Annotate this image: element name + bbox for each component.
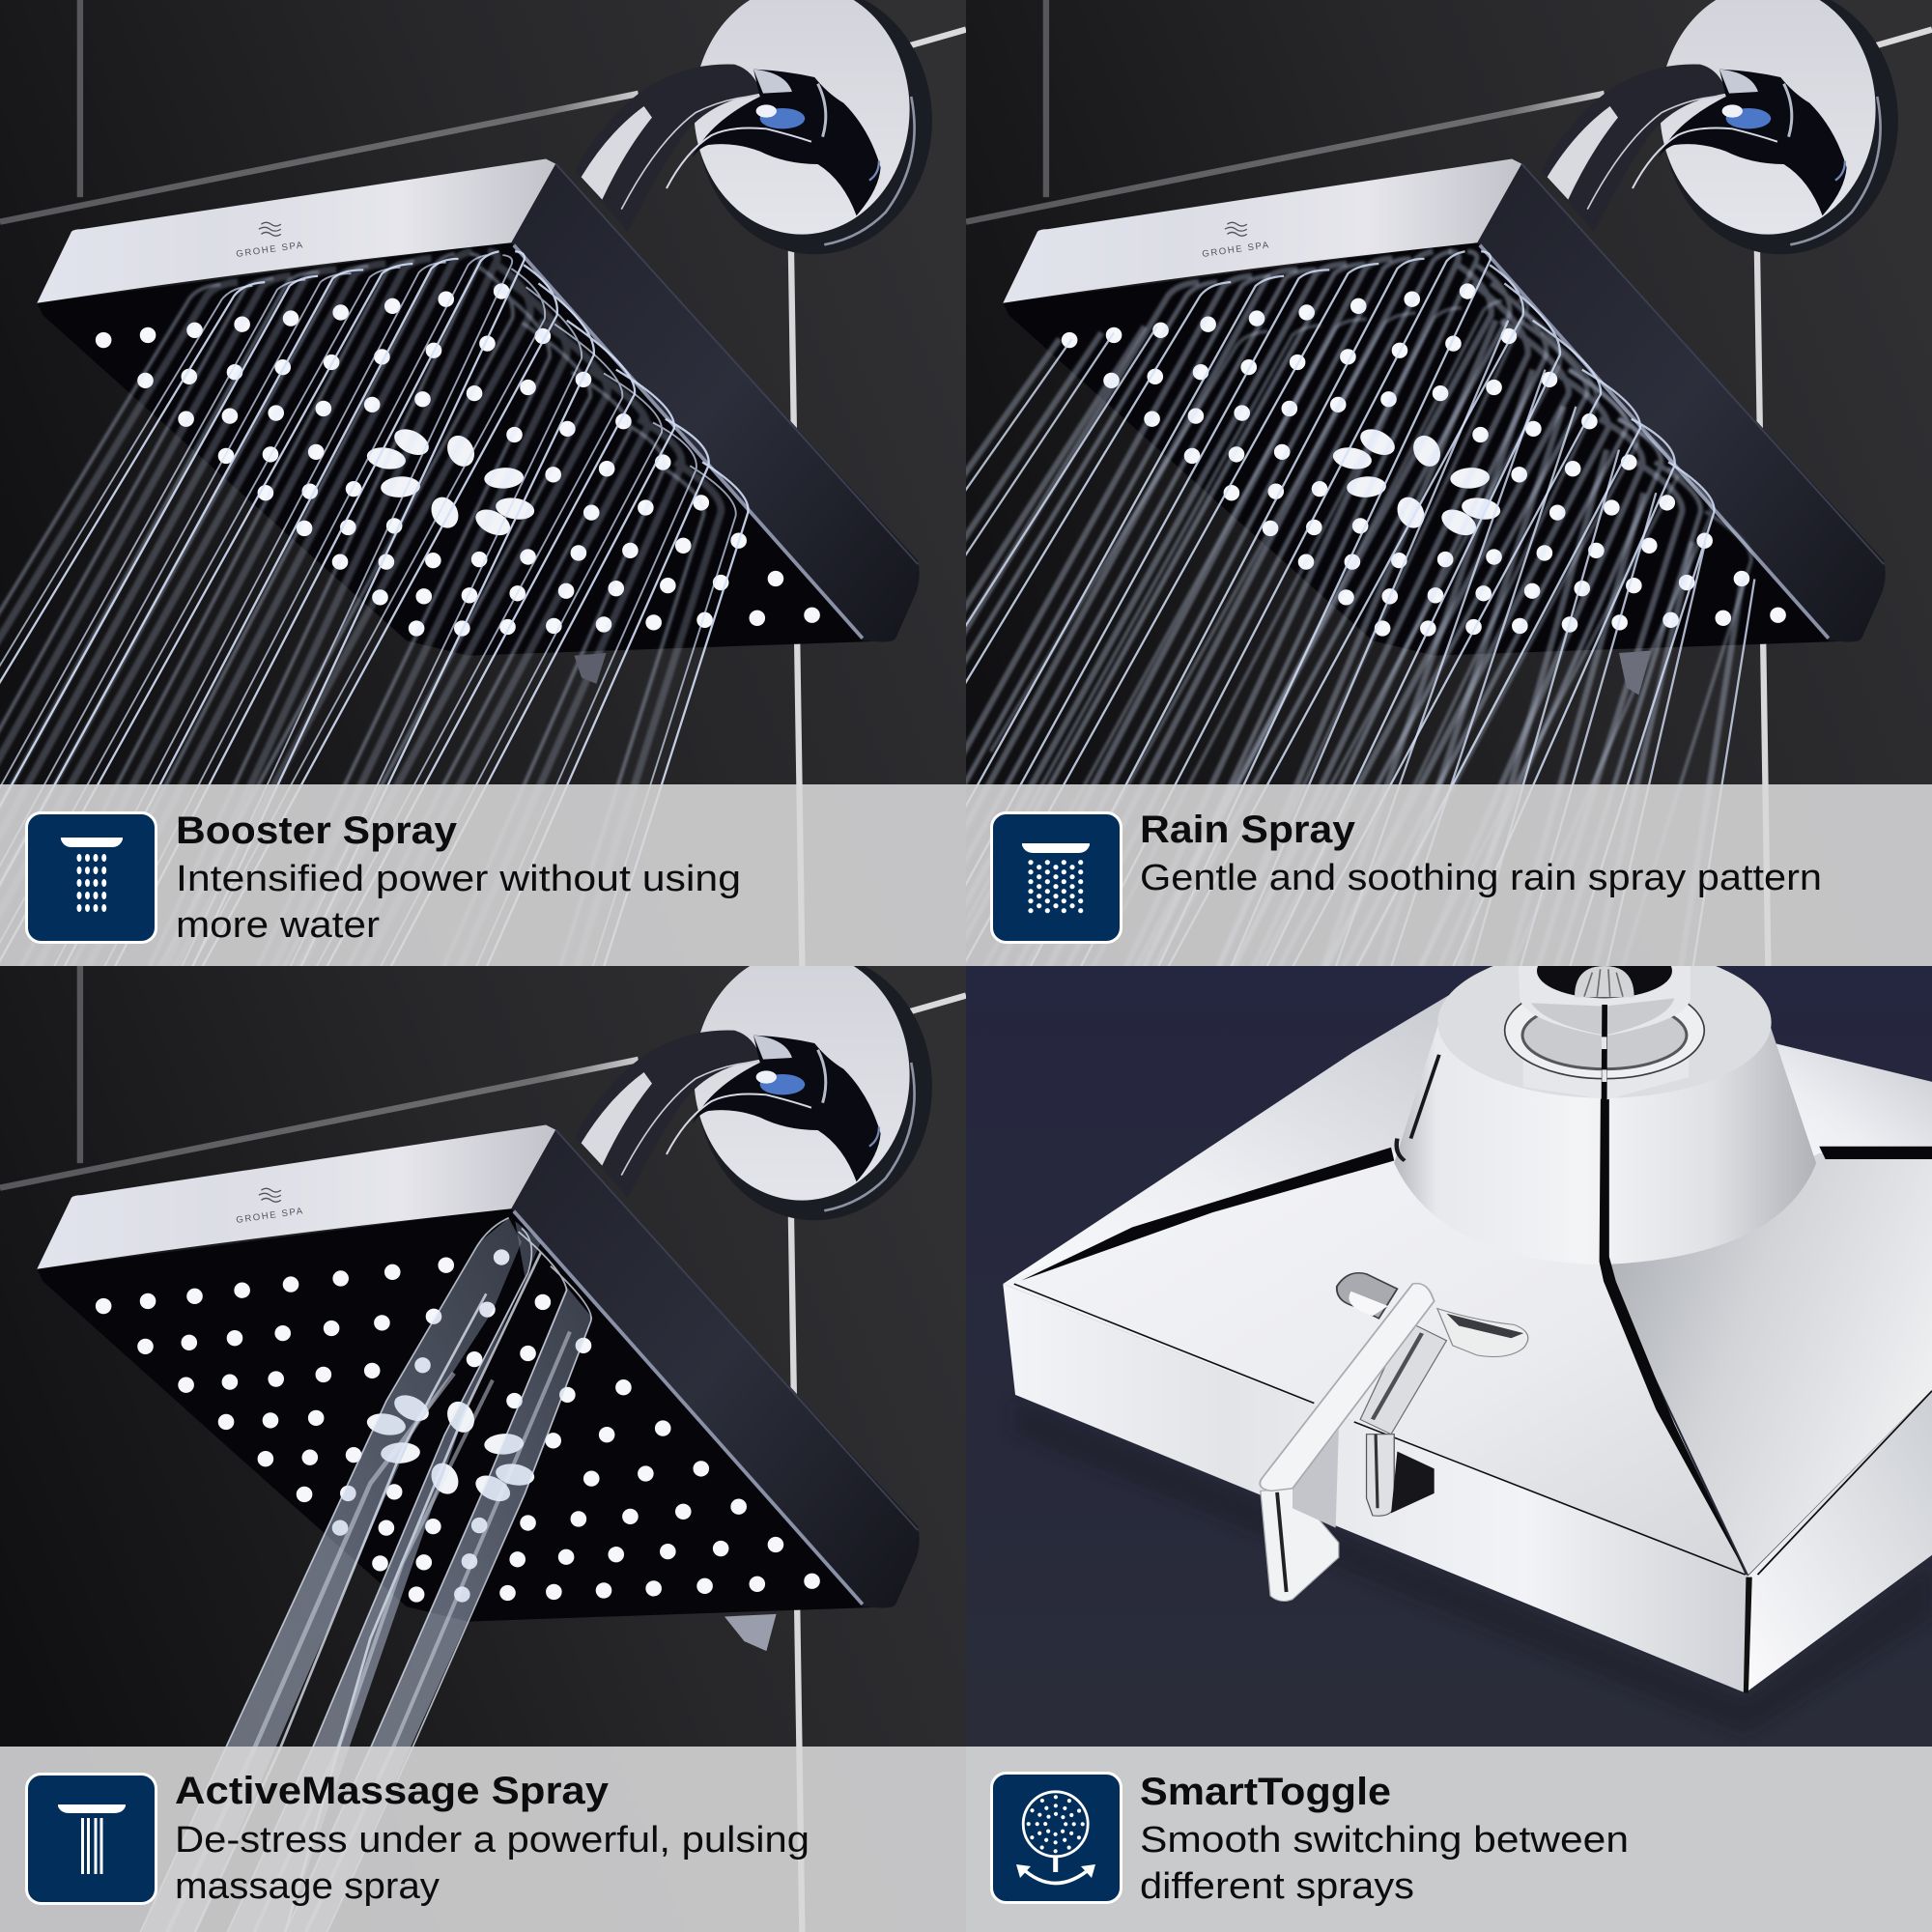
lever arm — [1260, 1284, 1435, 1491]
panel: booster spray — [0, 0, 966, 971]
caption bar — [0, 784, 966, 966]
icon: smarttoggle — [991, 1774, 1121, 1903]
caption text: rain spray: Rain Spray — [1140, 809, 1356, 851]
threaded fitting — [1437, 944, 1772, 1159]
caption text: smarttoggle: Smooth switching between — [1140, 1820, 1629, 1861]
lever lower blade — [1261, 1489, 1339, 1602]
caption text: booster spray: Intensified power without using — [176, 859, 741, 899]
icon: activemassage spray — [27, 1774, 156, 1903]
photo: booster spray shower head — [0, 0, 966, 966]
caption text: smarttoggle — [1140, 1771, 1629, 1907]
caption bar — [966, 1747, 1932, 1932]
top front faces — [1003, 1149, 1746, 1575]
cone — [1394, 1025, 1816, 1264]
caption text: rain spray: Gentle and soothing rain spray pattern — [1140, 858, 1822, 898]
panel: rain spray — [844, 0, 1932, 1016]
dark reflections — [1600, 1099, 1746, 1573]
caption text: activemassage spray: massage spray — [175, 1866, 440, 1907]
caption text: activemassage spray — [175, 1770, 810, 1907]
panel: activemassage spray — [0, 951, 966, 1932]
caption text: booster spray: more water — [176, 905, 380, 946]
icon: rain spray — [991, 813, 1121, 943]
caption text: smarttoggle: SmartToggle — [1140, 1771, 1391, 1813]
stem — [1367, 1435, 1394, 1516]
spray strands — [844, 251, 1754, 1016]
massage jets — [140, 1218, 592, 1932]
brand mark: GROHE SPA — [236, 240, 305, 260]
edge lines — [1014, 1284, 1932, 1575]
caption text: booster spray: Booster Spray — [176, 810, 458, 852]
knob under head — [1619, 650, 1651, 695]
caption text: rain spray — [1140, 809, 1822, 898]
slots — [1337, 1273, 1397, 1319]
brand mark: GROHE SPA — [236, 1206, 305, 1226]
caption text: booster spray — [176, 810, 741, 946]
icon: booster spray — [27, 813, 156, 943]
caption text: activemassage spray: ActiveMassage Spray — [175, 1770, 610, 1812]
spray strands — [0, 251, 749, 971]
caption text: smarttoggle: different sprays — [1140, 1866, 1414, 1907]
knob under head — [724, 1614, 777, 1651]
caption text: activemassage spray: De-stress under a powerful, pulsing — [175, 1820, 810, 1861]
knob under head — [574, 653, 607, 684]
caption bar — [966, 784, 1932, 966]
side faces — [1003, 1284, 1748, 1693]
panel: smarttoggle — [966, 944, 1932, 1932]
brand mark: GROHE SPA — [1202, 240, 1271, 260]
photo: rain spray shower head — [966, 0, 1932, 966]
top back faces — [1003, 995, 1459, 1284]
caption bar — [0, 1747, 966, 1932]
photo: massage spray shower head — [0, 966, 966, 1932]
product render: toggle lever on head — [966, 966, 1932, 1747]
